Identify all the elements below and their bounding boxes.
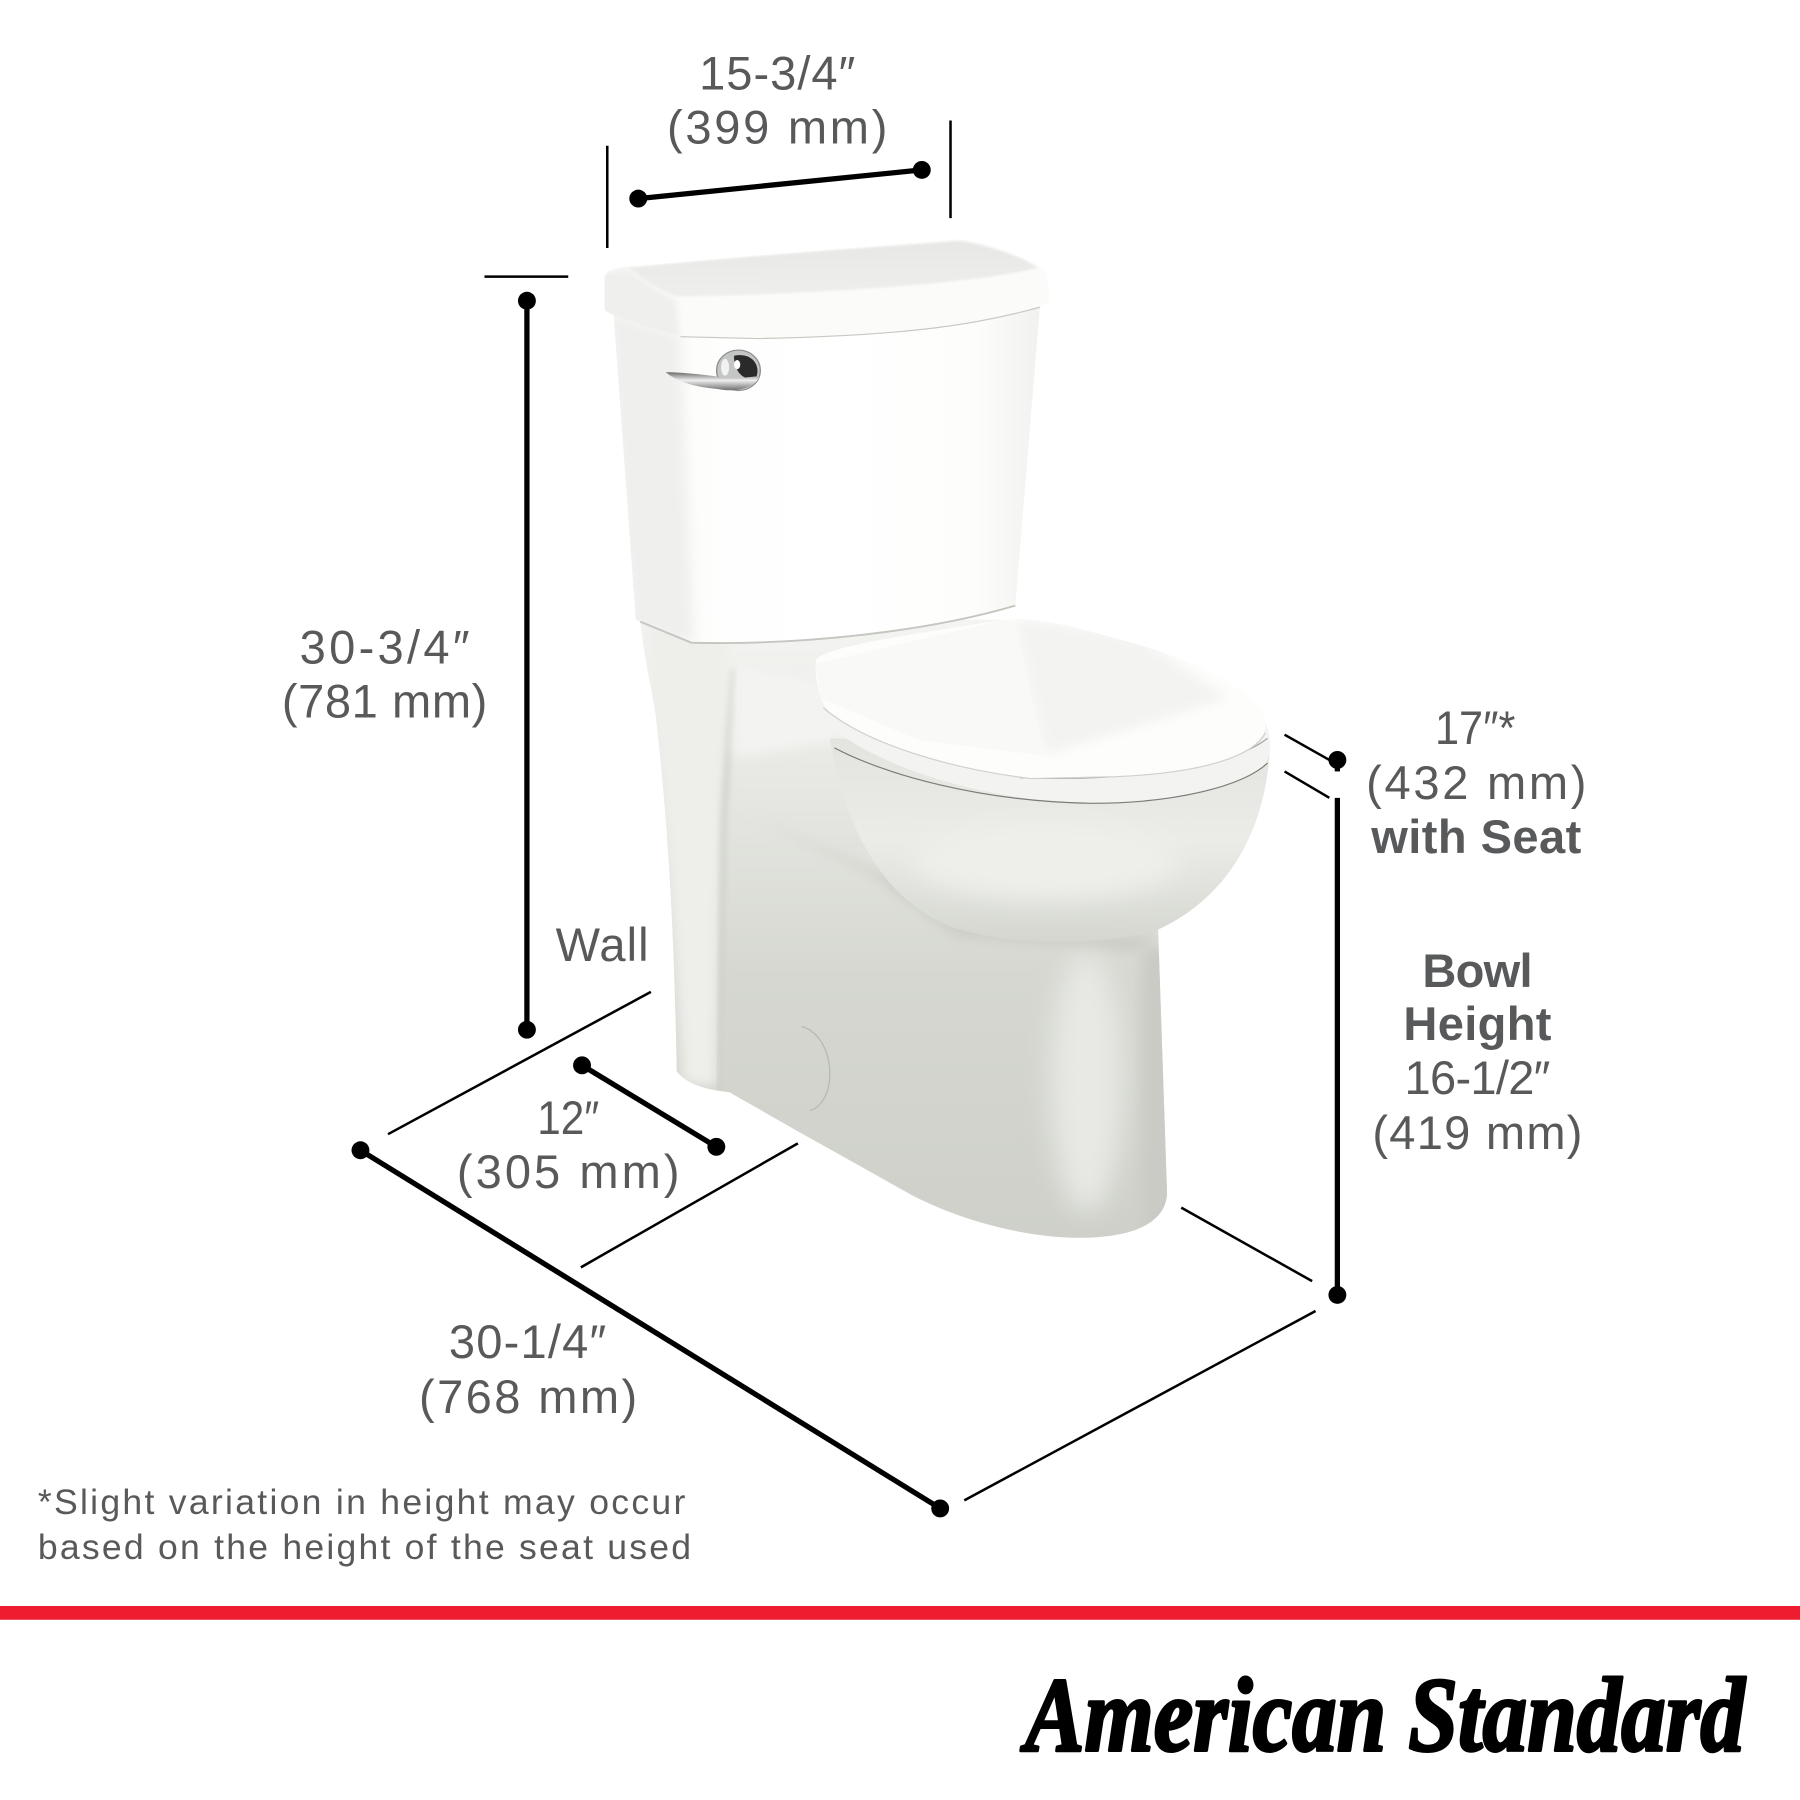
tank width dimension [607,121,951,248]
overall height dimension [484,277,568,1039]
water tank [598,239,1049,645]
label: tank width: 15-3/4″ [699,47,855,100]
label: wall: Wall [556,918,649,971]
toilet seat lid [816,618,1265,779]
label: rough-in: (305 mm) [457,1145,680,1198]
label: overall depth: (768 mm) [419,1370,637,1423]
label: tank width: (399 mm) [667,100,887,153]
flush handle [666,350,760,391]
rough-in dimension [388,992,798,1267]
label: bowl height: Height [1403,997,1552,1050]
label: rough-in: 12″ [537,1091,599,1144]
label: overall height: (781 mm) [282,674,487,727]
label: bowl height: (419 mm) [1372,1106,1582,1159]
toilet product image [598,239,1270,1240]
label: overall height: 30-3/4″ [300,621,470,674]
footnote: *Slight variation in height may occur [38,1482,685,1522]
seat ring [821,712,1270,803]
footnote: based on the height of the seat used [38,1527,691,1567]
overall depth dimension [352,1141,1316,1517]
bowl [821,712,1270,942]
footnote [38,1482,691,1567]
label: bowl height [1372,944,1582,1159]
label: seat height: (432 mm) [1366,756,1586,809]
tank lid [598,239,1049,342]
access cap [802,1026,830,1111]
label: bowl height: Bowl [1422,944,1533,997]
dimension lines [352,121,1346,1517]
label: seat height [1366,701,1586,863]
label: rough-in [457,1091,680,1198]
red divider bar [0,1606,1800,1620]
label: overall depth: 30-1/4″ [449,1315,606,1368]
label: bowl height: 16-1/2″ [1405,1051,1550,1104]
label: overall height [282,621,487,727]
label: seat height: with Seat [1370,810,1582,863]
label: overall depth [419,1315,637,1423]
label: seat height: 17″* [1435,701,1515,754]
toilet base and pedestal [640,620,1174,1240]
seat and bowl height dimension [1181,735,1346,1304]
label: tank width [667,47,887,153]
